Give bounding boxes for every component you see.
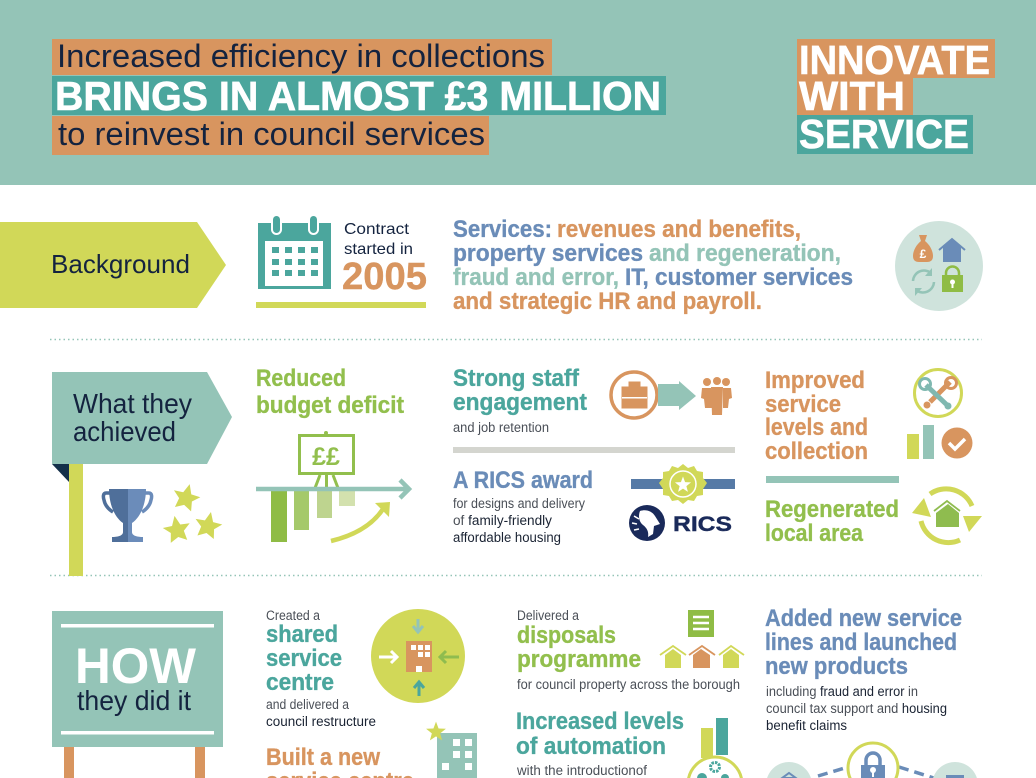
icon: services circle <box>895 221 983 311</box>
increased levels of automation text: with the introductionof <box>516 763 647 778</box>
innovate with service tag <box>797 37 995 157</box>
how they did it sign: HOW <box>75 638 197 694</box>
rics award text: for designs and delivery <box>453 496 585 511</box>
icon: tools in circle <box>914 370 962 416</box>
innovate with service tag: INNOVATE <box>799 37 990 83</box>
icon: bars and check <box>907 425 972 459</box>
title: to reinvest in council services <box>58 116 485 152</box>
services list: and regeneration, <box>649 240 841 267</box>
disposals programme text: programme <box>517 646 641 673</box>
chart: budget deficit bars and easel: ££ <box>312 443 340 471</box>
services list: property services <box>453 240 643 267</box>
innovate with service tag: SERVICE <box>799 111 969 157</box>
increased levels of automation text <box>516 708 684 778</box>
built a new service centre text <box>266 744 414 778</box>
title: Increased efficiency in collections <box>57 38 545 74</box>
contract start date <box>256 221 427 308</box>
contract start date: started in <box>344 241 413 258</box>
added new service lines text: benefit claims <box>766 718 847 733</box>
improved service levels text <box>765 367 868 465</box>
reduced budget deficit heading <box>256 365 404 419</box>
background arrow label <box>0 222 226 308</box>
icon: stars <box>161 481 224 544</box>
what they achieved signpost <box>52 372 232 576</box>
chart: budget deficit bars and easel <box>256 431 409 542</box>
background arrow label: Background <box>51 249 190 279</box>
contract start date: 2005 <box>342 256 427 298</box>
shared service centre text: service <box>266 645 342 672</box>
added new service lines text: Added new service <box>765 605 962 632</box>
increased levels of automation text: Increased levels <box>516 708 684 735</box>
icon: new building <box>426 722 477 778</box>
shared service centre text: centre <box>266 669 334 696</box>
disposals programme text: Delivered a <box>517 608 579 623</box>
strong staff engagement text: engagement <box>453 389 587 416</box>
reduced budget deficit heading: Reduced <box>256 365 346 392</box>
shared service centre text: and delivered a <box>266 697 349 712</box>
contract start date: Contract <box>344 221 410 238</box>
services list <box>453 216 853 315</box>
icon: briefcase to staff <box>611 372 732 418</box>
title: BRINGS IN ALMOST £3 MILLION <box>55 73 661 119</box>
rics logo: RICS <box>673 513 732 536</box>
added new service lines text: council tax support and housing <box>766 701 947 716</box>
services list: Services: <box>453 216 552 243</box>
regenerated local area text: Regenerated <box>765 496 899 523</box>
disposals programme text: disposals <box>517 622 616 649</box>
services list: revenues and benefits, <box>557 216 801 243</box>
services list: fraud and error, <box>453 264 619 291</box>
rics award text <box>453 467 593 545</box>
regenerated local area text: local area <box>765 520 864 547</box>
disposals programme text: for council property across the borough <box>517 677 740 692</box>
header band <box>0 0 1036 185</box>
icon: services circle: £ <box>920 247 927 261</box>
icon: shared service centre <box>371 609 465 703</box>
strong staff engagement text: and job retention <box>453 420 549 435</box>
title <box>52 38 666 155</box>
regenerated local area text <box>765 496 899 547</box>
shared service centre text <box>266 608 376 729</box>
rics logo <box>629 505 732 541</box>
disposals programme text <box>517 608 740 692</box>
innovate with service tag: WITH <box>799 73 905 119</box>
improved service levels text: levels and <box>765 414 868 441</box>
shared service centre text: Created a <box>266 608 320 623</box>
icon: award ribbon badge <box>631 464 735 504</box>
icon: trophy <box>103 489 152 542</box>
improved service levels text: service <box>765 391 841 418</box>
icon: secure network <box>766 743 978 778</box>
added new service lines text <box>765 605 962 733</box>
added new service lines text: lines and launched <box>765 629 957 656</box>
how they did it sign: they did it <box>77 685 191 716</box>
how they did it sign <box>52 611 223 778</box>
strong staff engagement text <box>453 365 587 435</box>
increased levels of automation text: of automation <box>516 733 666 760</box>
built a new service centre text: Built a new <box>266 744 380 771</box>
rics award text: of family-friendly <box>453 513 552 528</box>
icon: automation bars and gears <box>688 718 742 778</box>
reduced budget deficit heading: budget deficit <box>256 392 404 419</box>
rics award text: A RICS award <box>453 467 593 494</box>
improved service levels text: collection <box>765 438 868 465</box>
shared service centre text: shared <box>266 621 338 648</box>
what they achieved signpost: achieved <box>73 416 176 447</box>
rics award text: affordable housing <box>453 530 561 545</box>
icon: calendar <box>258 215 331 289</box>
what they achieved signpost: What they <box>73 388 192 419</box>
shared service centre text: council restructure <box>266 714 376 729</box>
strong staff engagement text: Strong staff <box>453 365 580 392</box>
services list: and strategic HR and payroll. <box>453 288 762 315</box>
services list: IT, customer services <box>625 264 853 291</box>
icon: regeneration house <box>912 489 982 543</box>
added new service lines text: including fraud and error in <box>766 684 918 699</box>
improved service levels text: Improved <box>765 367 865 394</box>
added new service lines text: new products <box>765 653 908 680</box>
icon: disposals houses <box>660 610 744 668</box>
